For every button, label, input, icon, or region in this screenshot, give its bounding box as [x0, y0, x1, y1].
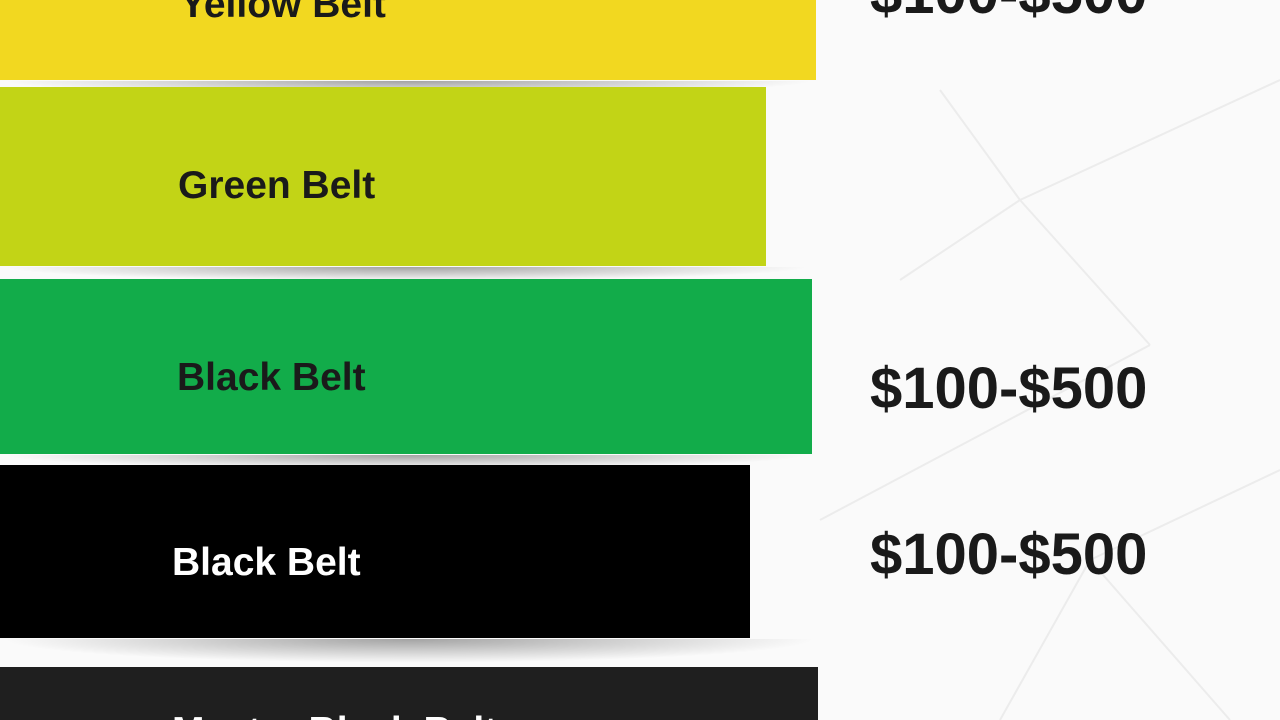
bar: master black belt [0, 667, 818, 720]
label: black belt: Black Belt [177, 356, 366, 399]
bar: green belt [0, 87, 766, 266]
label: black belt white: Black Belt [172, 541, 361, 584]
price: black belt 2: $100-$500 [870, 522, 1147, 587]
label: green belt: Green Belt [178, 164, 375, 207]
bar: black belt (green) [0, 279, 812, 454]
price: black belt: $100-$500 [870, 356, 1147, 421]
bar: black belt [0, 465, 750, 638]
bar: yellow belt [0, 0, 816, 80]
